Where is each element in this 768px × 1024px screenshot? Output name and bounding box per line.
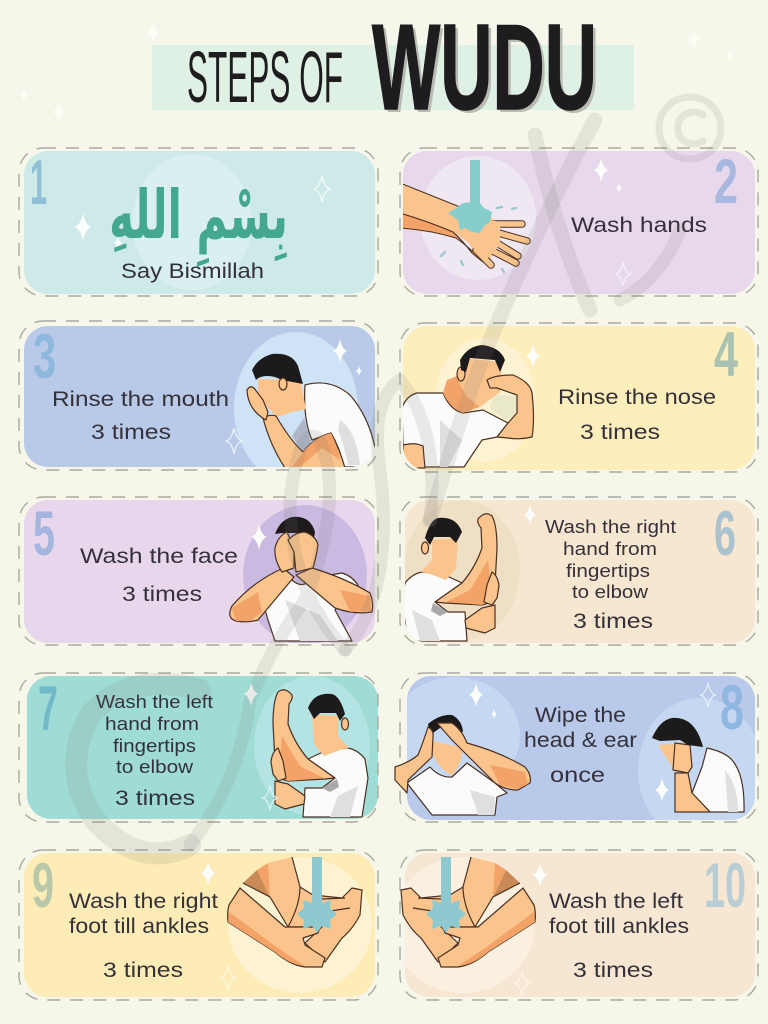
panel: step 5 wash the face: 5 xyxy=(33,499,55,569)
panel: step 1 say bismillah xyxy=(19,148,378,296)
panel: step 1 say bismillah: Say Bismillah xyxy=(121,260,264,283)
title: wudu shadow: WUDU xyxy=(375,2,600,138)
panel: step 10 wash left foot xyxy=(391,850,758,1000)
panel: step 4 rinse the nose xyxy=(400,320,758,472)
panel: step 6 wash right hand: 3 times xyxy=(573,610,653,633)
panel: step 9 wash right foot: 3 times xyxy=(103,959,183,982)
panel: step 9 wash right foot: foot till ankles xyxy=(69,915,209,938)
panel: step 3 rinse the mouth: 3 xyxy=(33,322,56,392)
icon: man wiping head front xyxy=(395,715,530,815)
panel: step 6 wash right hand: 6 xyxy=(714,499,736,569)
panel: step 6 wash right hand: hand from xyxy=(563,538,657,559)
panel: step 3 rinse the mouth xyxy=(19,321,378,484)
panel: step 1 say bismillah: 1 xyxy=(30,148,47,218)
icon: man washing face xyxy=(230,517,373,641)
panel: step 10 wash left foot: Wash the left xyxy=(549,890,683,913)
panel: step 6 wash right hand: fingertips xyxy=(566,560,650,581)
panel: step 5 wash the face xyxy=(19,497,378,645)
panel: step 2 wash hands: Wash hands xyxy=(571,214,707,237)
panel: step 7 wash left hand: to elbow xyxy=(116,756,194,777)
panel: step 6 wash right hand xyxy=(400,497,758,645)
icon: man rinsing nose xyxy=(402,345,534,468)
panel: step 6 wash right hand: Wash the right xyxy=(545,516,676,537)
panel: step 3 rinse the mouth: 3 times xyxy=(91,421,171,444)
panel: step 8 wipe head and ear: 8 xyxy=(720,673,744,743)
panel: step 10 wash left foot: 3 times xyxy=(573,959,653,982)
icon: man washing right arm xyxy=(402,514,499,641)
panel: step 7 wash left hand: 3 times xyxy=(115,787,195,810)
panel: step 2 wash hands xyxy=(400,147,758,296)
watermark xyxy=(76,97,721,853)
icon: hands washing right foot xyxy=(228,857,362,967)
panel: step 7 wash left hand: fingertips xyxy=(113,735,196,756)
panel: step 7 wash left hand: hand from xyxy=(105,713,199,734)
panel: step 7 wash left hand: 7 xyxy=(38,674,58,744)
panel: step 8 wipe head and ear xyxy=(394,672,759,823)
background sparkles xyxy=(20,22,734,124)
icon: man washing left arm xyxy=(271,690,368,817)
panel: step 9 wash right foot xyxy=(19,850,378,1000)
panel: step 4 rinse the nose: 3 times xyxy=(580,421,660,444)
panel: step 9 wash right foot: 9 xyxy=(32,851,54,921)
panel: step 3 rinse the mouth: Rinse the mouth xyxy=(52,388,229,411)
panel: step 7 wash left hand xyxy=(19,673,378,822)
panel: step 5 wash the face: 3 times xyxy=(122,583,202,606)
title: STEPS OF xyxy=(187,38,343,118)
title band xyxy=(152,45,634,110)
icon: hands washing left foot xyxy=(401,857,535,967)
panel: step 8 wipe head and ear: Wipe the xyxy=(535,704,626,727)
watermark copyright mark xyxy=(659,97,721,159)
panel: step 4 rinse the nose: 4 xyxy=(714,320,738,390)
panel: step 7 wash left hand: Wash the left xyxy=(96,691,213,712)
panel: step 10 wash left foot: foot till ankles xyxy=(549,915,689,938)
panel: step 8 wipe head and ear: once xyxy=(550,764,605,787)
title: wudu: WUDU xyxy=(372,0,597,135)
icon: man rinsing mouth xyxy=(247,354,376,468)
panel: step 8 wipe head and ear: head & ear xyxy=(524,729,637,752)
panel: step 5 wash the face: Wash the face xyxy=(80,545,238,568)
icon: man wiping ear side xyxy=(652,718,744,812)
panel: step 9 wash right foot: Wash the right xyxy=(69,890,218,913)
panel: step 1 say bismillah: بِسْمِ اللهِ xyxy=(109,177,288,267)
icon: hands under water xyxy=(400,160,527,272)
panel: step 2 wash hands: 2 xyxy=(714,147,738,217)
title xyxy=(152,0,634,138)
panel: step 6 wash right hand: to elbow xyxy=(572,581,649,602)
panel: step 4 rinse the nose: Rinse the nose xyxy=(558,386,716,409)
